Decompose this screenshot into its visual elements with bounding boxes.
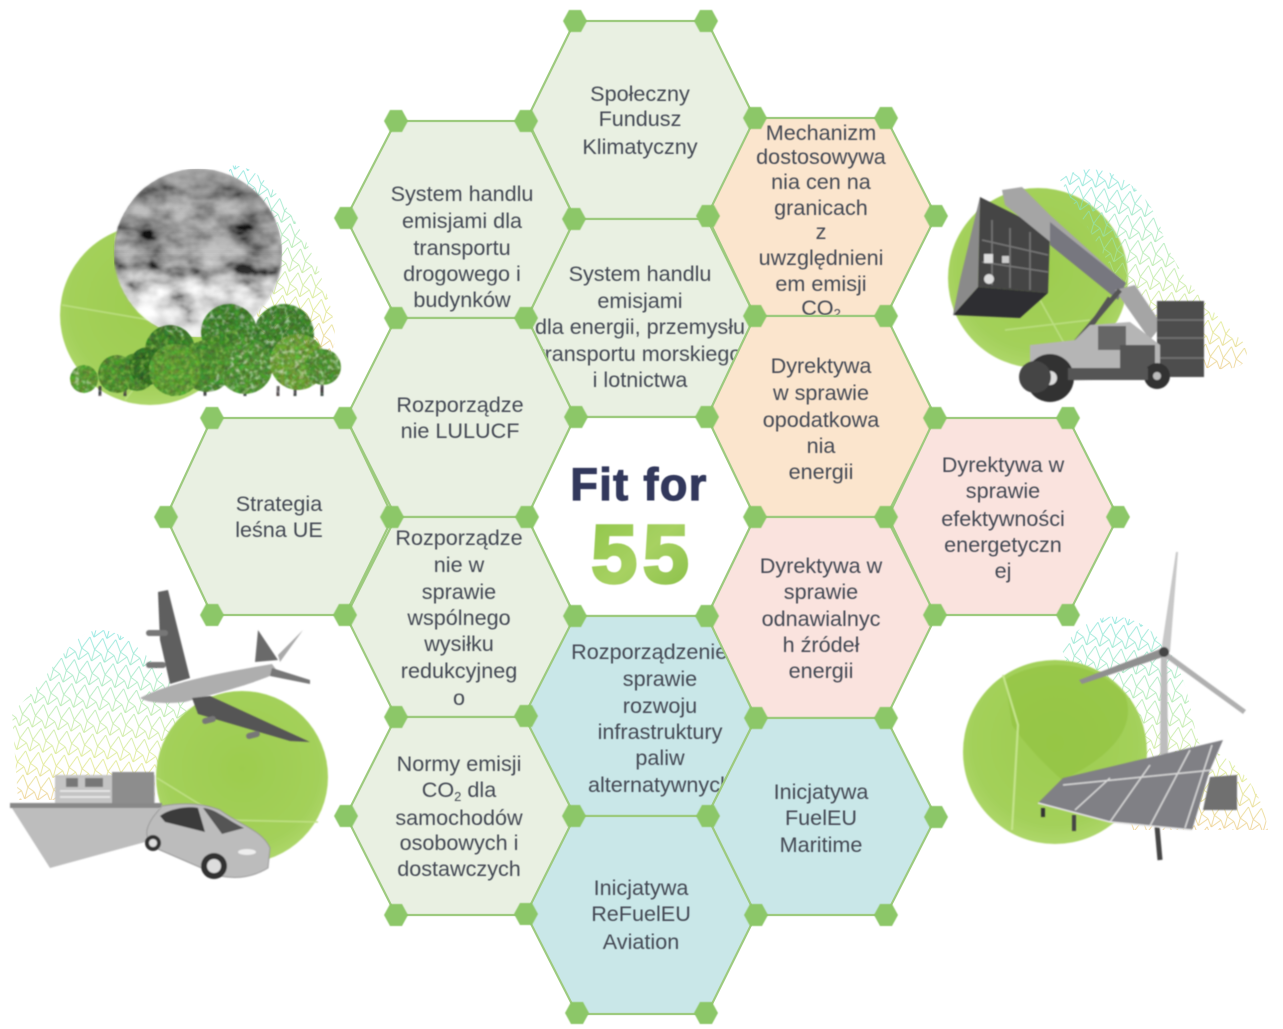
forest <box>70 304 341 396</box>
label: Społeczny <box>590 81 690 106</box>
label: transportu morskiego <box>539 341 741 366</box>
label: 2 <box>834 306 841 321</box>
label: infrastruktury <box>598 719 723 744</box>
illustration: wind turbine and solar panel <box>963 552 1275 860</box>
label: dostosowywa <box>756 144 887 169</box>
hexagon shape <box>707 118 936 316</box>
hexagon corner nodes <box>154 10 1130 1024</box>
hexagon shape <box>707 718 936 915</box>
label: samochodów <box>395 805 523 830</box>
label: Inicjatywa <box>774 779 869 804</box>
label: Dyrektywa <box>771 353 872 378</box>
label: Mechanizm <box>766 120 876 145</box>
label: z <box>816 219 826 244</box>
label: paliw <box>635 745 685 770</box>
label: i lotnictwa <box>593 367 688 392</box>
label: Inicjatywa <box>594 875 689 900</box>
label: osobowych i <box>400 830 518 855</box>
label: Rozporządze <box>396 392 524 417</box>
title: Fit for: Fit for <box>570 459 708 510</box>
label: Dyrektywa w <box>760 553 883 578</box>
hexagon: Społeczny Fundusz Klimatyczny <box>527 21 755 219</box>
hexagon: effort sharing <box>346 517 575 717</box>
hexagon: ReFuelEU Aviation <box>526 816 756 1014</box>
title: 55: 55 <box>591 509 695 600</box>
label: Rozporządze <box>395 525 523 550</box>
label: Fundusz <box>599 106 681 131</box>
label: Klimatyczny <box>582 134 698 159</box>
hexagon shape <box>527 21 755 219</box>
hexagon: renewable energy directive <box>707 517 936 718</box>
label: Dyrektywa w <box>942 452 1065 477</box>
label: dla <box>461 777 497 802</box>
hexagon shape <box>526 816 756 1014</box>
label: dostawczych <box>397 856 521 881</box>
hexagon: energy efficiency directive <box>888 418 1118 615</box>
label: ReFuelEU <box>591 901 691 926</box>
label: odnawialnyc <box>762 606 881 631</box>
hexagon shape <box>346 318 575 517</box>
label: nia cen na <box>771 169 872 194</box>
illustration: container handler <box>948 160 1250 402</box>
label: em emisji <box>775 271 867 296</box>
label: alternatywnych <box>588 772 732 797</box>
label: nie LULUCF <box>401 418 519 443</box>
leaf vein net <box>229 166 335 352</box>
label: efektywności <box>941 506 1065 531</box>
hexagon shape <box>346 517 575 717</box>
label: h źródeł <box>783 632 860 657</box>
hexagon shape <box>707 316 936 517</box>
label: Normy emisji <box>397 751 521 776</box>
leaf vein net <box>12 630 187 800</box>
label: energii <box>789 459 853 484</box>
reach stacker <box>953 187 1204 402</box>
label: drogowego i <box>403 261 521 286</box>
label: granicach <box>774 195 868 220</box>
leaf circle <box>948 188 1128 368</box>
hexagon: CBAM <box>707 118 936 321</box>
hexagon shape <box>888 418 1118 615</box>
label: transportu <box>413 235 511 260</box>
hexagon: FuelEU Maritime <box>707 718 936 915</box>
label: sprawie <box>966 478 1040 503</box>
label: energii <box>789 658 853 683</box>
label: CO <box>422 777 497 804</box>
label: nia <box>807 433 836 458</box>
label: opodatkowa <box>763 407 880 432</box>
label: nie w <box>434 552 485 577</box>
label: wysiłku <box>423 631 494 656</box>
label: emisjami <box>597 288 683 313</box>
label: emisjami dla <box>402 208 523 233</box>
car <box>145 804 270 879</box>
hexagon: energy taxation directive <box>707 316 936 517</box>
hexagon: CO2 standards for cars <box>346 717 575 915</box>
label: leśna UE <box>235 517 323 542</box>
label: Rozporządzenie w <box>571 639 749 664</box>
label: ej <box>995 558 1011 583</box>
label: System handlu <box>569 261 711 286</box>
label: sprawie <box>623 666 697 691</box>
hexagon: EU forest strategy <box>166 418 393 615</box>
illustration: plane, ship and car <box>8 590 328 879</box>
hexagon: alternative fuels infrastructure <box>524 616 756 816</box>
hexagon: ETS road transport and buildings <box>346 121 575 318</box>
illustration: earth and forest <box>60 160 341 405</box>
leaf circle <box>156 691 328 863</box>
airplane <box>140 590 310 742</box>
hexagon shape <box>527 219 755 417</box>
label: Aviation <box>603 929 679 954</box>
leaf circle <box>963 660 1147 844</box>
label: Maritime <box>780 832 862 857</box>
hexagon shape <box>707 517 936 718</box>
label: rozwoju <box>623 693 697 718</box>
label: budynków <box>413 287 511 312</box>
hexagon: LULUCF <box>346 318 575 517</box>
globe <box>114 169 282 337</box>
hexagon shape <box>524 616 756 816</box>
label: System handlu <box>391 181 533 206</box>
hexagon shape <box>346 717 575 915</box>
label: FuelEU <box>785 805 857 830</box>
leaf vein net <box>1060 169 1247 370</box>
label: o <box>453 685 465 710</box>
label: sprawie <box>784 579 858 604</box>
label: uwzględnieni <box>759 245 883 270</box>
leaf vein net <box>1062 616 1268 830</box>
label: dla energii, przemysłu <box>535 314 745 339</box>
hexagon: centre Fit for 55 <box>527 417 755 616</box>
label: Strategia <box>236 491 323 516</box>
hexagon shape <box>166 418 393 615</box>
label: CO <box>801 295 841 321</box>
leaf circle <box>60 225 240 405</box>
label: wspólnego <box>406 605 511 630</box>
label: sprawie <box>422 579 496 604</box>
label: redukcyjneg <box>401 658 517 683</box>
solar panels <box>1038 740 1237 860</box>
label: energetyczn <box>944 532 1062 557</box>
hexagon: ETS energy, industry, maritime, aviation <box>527 219 755 417</box>
hexagon shape <box>346 121 575 318</box>
label: 2 <box>454 789 461 804</box>
ship <box>10 772 162 868</box>
hexagon shape <box>527 417 755 616</box>
wind turbine <box>1079 552 1246 755</box>
label: w sprawie <box>772 380 869 405</box>
